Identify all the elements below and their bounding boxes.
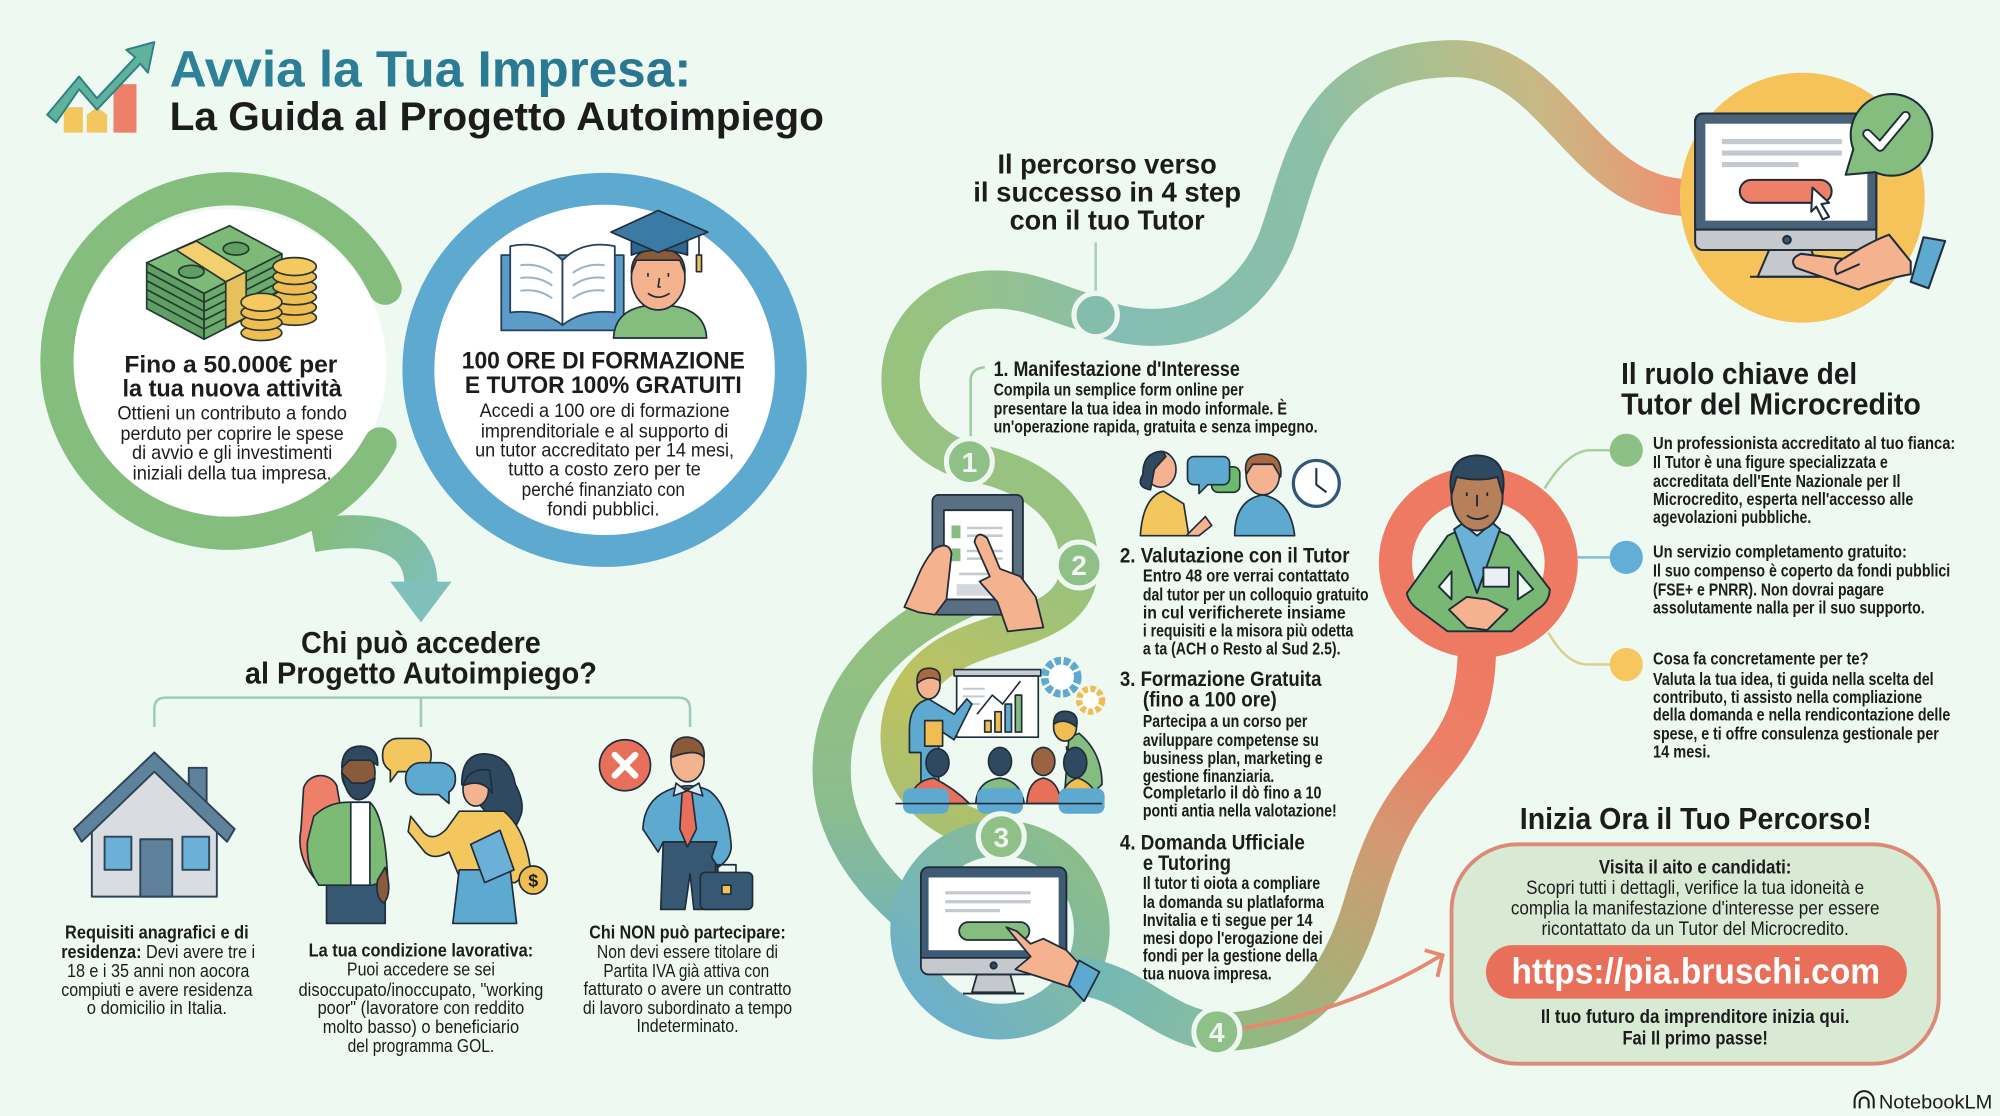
path: left bend [901, 290, 1096, 462]
path: outer left curve [832, 589, 989, 921]
text block: Visita il aito e candidati: [1599, 858, 1791, 879]
heading [462, 348, 745, 399]
path: top ribbon to computer [1096, 59, 1690, 327]
heading [245, 626, 597, 691]
icon: excluded businessman [599, 737, 753, 909]
text: step 2: i requisiti e la misora più odetta [1143, 620, 1354, 640]
text: step 4: la domanda su platlaforma [1143, 892, 1325, 912]
text: accredited professional [1653, 433, 1955, 527]
panel: road path [832, 59, 1690, 1032]
text block: un tutor accreditato per 14 mesi, [475, 440, 734, 462]
text block [475, 400, 734, 520]
logo: NotebookLM: NotebookLM [1879, 1092, 1992, 1113]
panel: tutor portrait [1395, 455, 1561, 642]
text block [117, 403, 347, 485]
text: work condition: Puoi accedere se sei [347, 959, 495, 980]
text: step 4 [1120, 829, 1325, 984]
text: step 4: e Tutoring [1143, 850, 1231, 875]
text: age and residence: Requisiti anagrafici e di [65, 922, 249, 943]
icon: job seekers talking [300, 738, 547, 923]
text: step 1: Compila un semplice form online per [994, 379, 1244, 399]
text: what the tutor does: Cosa fa concretamente per te? [1653, 648, 1869, 668]
heading: Chi può accedere [301, 626, 541, 660]
node 1: 1 [962, 447, 977, 478]
text: step 3: ponti antia nella valotazione! [1143, 800, 1337, 820]
heading [122, 351, 342, 403]
text: step 3: gestione finanziaria. [1143, 766, 1274, 786]
text: free service [1653, 541, 1950, 617]
panel: funding circle [57, 189, 452, 622]
text block: perché finanziato con [522, 479, 685, 501]
node 4: 4 [1209, 1017, 1225, 1048]
text: work condition: La tua condizione lavorativa: [309, 940, 533, 961]
icon: monitor with pointing hand [921, 867, 1099, 1001]
url button [1486, 945, 1907, 999]
heading: Fino a 50.000€ per [124, 351, 338, 378]
text: step 4: tua nuova impresa. [1143, 964, 1272, 984]
url button: https://pia.bruschi.com [1511, 951, 1880, 991]
bracket connector [154, 698, 690, 727]
text: accredited professional: accreditata dell'Ente Nazionale per Il [1653, 471, 1901, 491]
text: step 4: mesi dopo l'erogazione dei [1143, 928, 1323, 948]
heading: call to action: Inizia Ora il Tuo Percorso! [1520, 802, 1872, 836]
icon: money and coins [147, 226, 316, 341]
text: work condition: disoccupato/inoccupato, "working [298, 979, 543, 1000]
heading: steps: Il percorso verso [997, 148, 1217, 179]
icon: job seekers talking: $ [528, 870, 538, 890]
text: accredited professional: Microcredito, esperta nell'accesso alle [1653, 489, 1913, 509]
text block: iniziali della tua impresa. [133, 463, 332, 485]
ring around monitor [908, 838, 1092, 1022]
icon: training class [895, 661, 1105, 814]
text: who cannot join: Chi NON può partecipare: [589, 922, 786, 943]
coral ring [1395, 483, 1561, 642]
text: step 3: (fino a 100 ore) [1143, 687, 1277, 712]
text: step 3: aviluppare competense su [1143, 730, 1319, 750]
text: free service: (FSE+ e PNRR). Non dovrai pagare [1653, 580, 1884, 600]
node 3: 3 [993, 822, 1009, 853]
closing text [1541, 1007, 1849, 1050]
text block: Accedi a 100 ore di formazione [480, 400, 730, 422]
bullet: green dot [1610, 434, 1643, 467]
text block: imprenditoriale e al supporto di [481, 420, 728, 442]
card background [1452, 844, 1939, 1064]
text: free service: assolutamente nalla per il suo supporto. [1653, 597, 1925, 617]
heading: tutor role: Il ruolo chiave del [1621, 357, 1857, 391]
text block: fondi pubblici. [547, 498, 659, 520]
node 2: 2 [1071, 550, 1087, 581]
illustration: computer on yellow circle [1680, 73, 1945, 323]
node 2 [1056, 542, 1102, 588]
text: step 3 [1120, 666, 1337, 820]
heading: al Progetto Autoimpiego? [245, 657, 597, 691]
path: to tutor [1217, 644, 1477, 1032]
text: who cannot join: Partita IVA già attiva con [603, 960, 769, 981]
step nodes [946, 439, 1240, 1055]
text: age and residence: o domicilio in Italia. [87, 997, 227, 1018]
text: step 1: 1. Manifestazione d'Interesse [994, 356, 1240, 381]
text: step 3: business plan, marketing e [1143, 748, 1323, 768]
text: work condition [298, 940, 543, 1056]
text: what the tutor does: Valuta la tua idea, ti guida nella scelta del [1653, 669, 1934, 689]
text: age and residence: compiuti e avere residenza [61, 979, 253, 1000]
text: step 1 [994, 356, 1318, 436]
text: step 4: Il tutor ti oiota a compliare [1143, 873, 1320, 893]
text: free service: Un servizio completamento gratuito: [1653, 541, 1907, 561]
tutor connectors [1545, 450, 1610, 664]
path: inner curve [900, 462, 1079, 837]
text: step 2: 2. Valutazione con il Tutor [1120, 542, 1350, 567]
text block: ricontattato da un Tutor del Microcredito. [1541, 919, 1849, 940]
heading: steps: con il tuo Tutor [1010, 205, 1205, 236]
heading: 100 ORE DI FORMAZIONE [462, 348, 745, 375]
text block: Scopri tutti i dettagli, verifice la tua idoneità e [1526, 878, 1864, 899]
text: work condition: molto basso) o beneficiario [323, 1016, 519, 1037]
text: step 4: Invitalia e ti segue per 14 [1143, 910, 1313, 930]
start connector and node [1074, 242, 1117, 337]
text: who cannot join: Indeterminato. [636, 1015, 739, 1036]
text: step 3: Completarlo il dò fino a 10 [1143, 782, 1321, 802]
panel: eligibility [61, 626, 792, 1056]
step 1 connector [971, 367, 985, 436]
node 1 [946, 439, 992, 485]
text: what the tutor does [1653, 648, 1950, 762]
text: step 2: a ta (ACH o Resto al Sud 2.5). [1143, 638, 1341, 658]
text: step 3: 3. Formazione Gratuita [1120, 666, 1322, 691]
text: accredited professional: agevolazioni pubbliche. [1653, 507, 1811, 527]
text: who cannot join [583, 922, 792, 1036]
heading: main title: Avvia la Tua Impresa: [170, 41, 691, 98]
title block [47, 41, 824, 139]
panel background [73, 209, 386, 523]
text: age and residence [61, 922, 255, 1018]
text: step 2: in cul verificherete insiame [1143, 603, 1346, 623]
text: step 2: Entro 48 ore verrai contattato [1143, 566, 1350, 586]
bullet: yellow dot [1610, 648, 1643, 681]
text: step 1: presentare la tua idea in modo informale. È [994, 398, 1287, 419]
text: who cannot join: di lavoro subordinato a tempo [583, 997, 792, 1018]
text: step 1: un'operazione rapida, gratuita e senza impegno. [994, 416, 1318, 436]
closing text: Fai Il primo passe! [1622, 1029, 1768, 1050]
panel: training circle [418, 189, 791, 551]
icon: house [74, 753, 235, 897]
heading: steps: il successo in 4 step [973, 177, 1241, 208]
heading: tutor role: Tutor del Microcredito [1621, 388, 1921, 422]
text block: Ottieni un contributo a fondo [117, 403, 347, 425]
text: work condition: del programma GOL. [348, 1035, 494, 1056]
text: work condition: poor" (lavoratore con reddito [318, 997, 524, 1018]
arrow: ring tail to eligibility section [312, 532, 452, 622]
text: age and residence: 18 e i 35 anni non aocora [67, 960, 250, 981]
bullet: blue dot [1610, 541, 1643, 574]
closing text: Il tuo futuro da imprenditore inizia qui. [1541, 1007, 1849, 1028]
heading: tutor role [1621, 357, 1921, 422]
icon: tutor conversation [1140, 452, 1339, 536]
icon: graduate [611, 210, 708, 338]
text: step 2: dal tutor per un colloquio gratuito [1143, 585, 1369, 605]
text: who cannot join: fatturato o avere un contratto [584, 978, 791, 999]
icon: book [501, 245, 624, 330]
text block: tutto a costo zero per te [508, 459, 701, 481]
text: who cannot join: Non devi essere titolare di [597, 941, 778, 962]
arrow: step 4 to call to action [1244, 950, 1443, 1028]
heading: subtitle: La Guida al Progetto Autoimpiego [170, 95, 824, 139]
text block: perduto per coprire le spese [121, 423, 344, 445]
text: age and residence: residenza: Devi avere tre i [61, 941, 255, 962]
text: step 4: 4. Domanda Ufficiale [1120, 829, 1305, 854]
icon: growth chart with arrow [47, 42, 154, 133]
heading: la tua nuova attività [122, 376, 342, 403]
node 3 [978, 814, 1024, 860]
green ring [57, 189, 385, 533]
text block [1511, 858, 1879, 940]
heading: E TUTOR 100% GRATUITI [465, 372, 742, 399]
icon: tutor figure [1407, 455, 1550, 631]
text: step 3: Partecipa a un corso per [1143, 711, 1307, 731]
text: step 4: fondi per la gestione della [1143, 946, 1318, 966]
heading: steps [973, 148, 1241, 236]
blue ring [418, 189, 791, 551]
text: what the tutor does: 14 mesi. [1653, 742, 1710, 762]
text: step 2 [1120, 542, 1369, 658]
text: accredited professional: Il Tutor è una figure specializzata e [1653, 452, 1888, 472]
panel: call to action [1452, 844, 1939, 1064]
node 4 [1194, 1009, 1240, 1055]
path: to step 4 [1078, 976, 1217, 1032]
icon: tablet with hands [904, 495, 1043, 631]
text: what the tutor does: contributo, ti assisto nella compliazione [1653, 687, 1922, 707]
text block: complia la manifestazione d'interesse per essere [1511, 898, 1879, 919]
text block: di avvio e gli investimenti [132, 442, 332, 464]
